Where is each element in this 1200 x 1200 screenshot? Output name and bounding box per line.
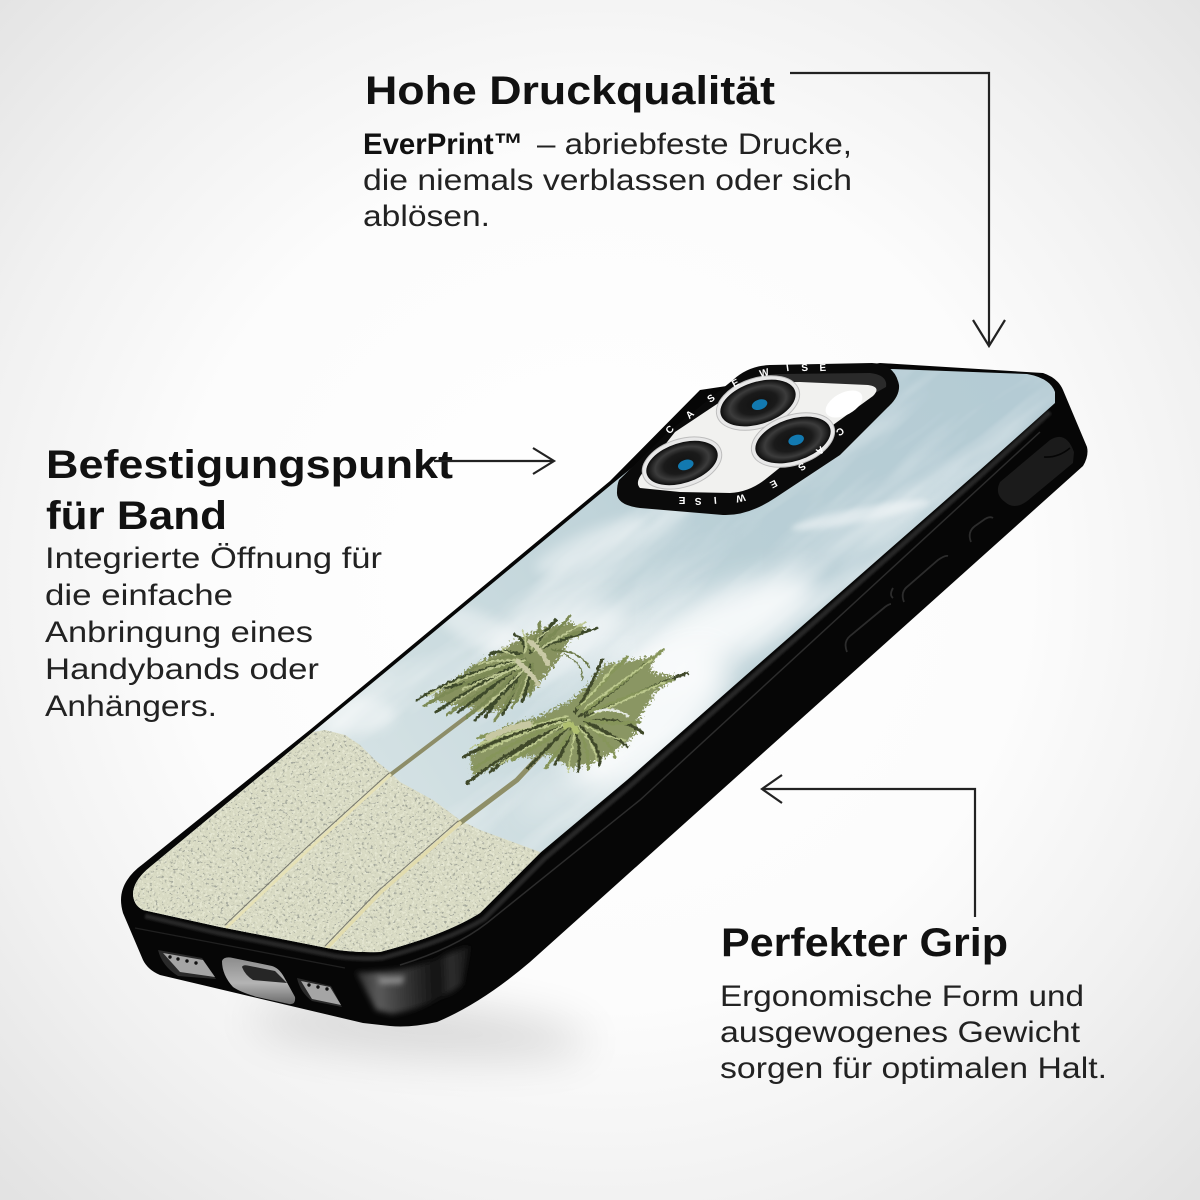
heading: Perfekter Grip <box>721 921 1008 965</box>
body text: EverPrint™ <box>363 128 523 161</box>
brand text: S <box>795 460 807 473</box>
callout: Perfekter Grip <box>720 921 1107 1085</box>
brand text: E <box>819 363 827 374</box>
heading: Befestigungspunkt <box>46 443 453 487</box>
wall texture light <box>133 730 537 952</box>
body text: Handybands oder <box>45 653 319 686</box>
body text <box>363 128 852 233</box>
brand text <box>664 363 846 506</box>
brand text: E <box>767 477 779 490</box>
speaker grille left <box>158 950 216 979</box>
corner glare <box>356 945 470 1014</box>
side seam <box>400 432 1040 965</box>
body text: – abriebfeste Drucke, <box>537 128 852 161</box>
heading: für Band <box>46 494 227 538</box>
callout: Hohe Druckqualität <box>363 69 852 233</box>
brand text: E <box>678 494 685 505</box>
side tab <box>998 437 1074 506</box>
arrow: print quality <box>790 73 1005 346</box>
printed back: palm artwork <box>133 369 1055 952</box>
body text: ausgewogenes Gewicht <box>720 1016 1081 1049</box>
tab line <box>1044 448 1070 457</box>
bottom seam <box>135 928 345 968</box>
palm 1 fronds <box>417 616 597 720</box>
body text: Anbringung eines <box>45 616 313 649</box>
body text <box>45 542 382 723</box>
body text <box>720 980 1107 1085</box>
body text: ablösen. <box>363 200 490 233</box>
palm 2 <box>463 650 687 783</box>
sky <box>133 369 1055 952</box>
lens: top <box>709 366 807 440</box>
frame top sheen <box>745 373 886 392</box>
brand text: S <box>694 495 702 506</box>
brand text: C <box>833 424 846 438</box>
arrow: grip <box>762 775 975 917</box>
charging port <box>222 957 295 1004</box>
palm 1 crown mass <box>432 622 588 711</box>
heading <box>46 443 453 538</box>
brand text: S <box>801 363 809 374</box>
palm 2 crown mass <box>470 656 675 776</box>
glass window <box>638 382 877 493</box>
camera frame <box>617 363 899 515</box>
case body <box>121 363 1088 1026</box>
phone shadow <box>249 992 591 1068</box>
wall texture dark <box>134 730 540 952</box>
brand text: S <box>706 392 718 405</box>
callout: Befestigungspunkt für Band <box>45 443 453 723</box>
clouds <box>212 370 1046 949</box>
palm trunks <box>225 705 545 948</box>
lens: right <box>744 403 842 477</box>
body text: sorgen für optimalen Halt. <box>720 1052 1107 1085</box>
lens: left <box>636 428 728 498</box>
camera module <box>617 363 899 515</box>
palm 1 <box>417 616 597 720</box>
inner rim sheen <box>145 412 1050 958</box>
brand text: W <box>758 367 771 380</box>
body text: die niemals verblassen oder sich <box>363 164 852 197</box>
volume and side buttons <box>846 517 993 652</box>
body text: die einfache <box>45 579 233 612</box>
body text: Integrierte Öffnung für <box>45 542 382 575</box>
body text: Ergonomische Form und <box>720 980 1084 1013</box>
arrow: strap attachment <box>434 448 554 474</box>
brand text: E <box>730 377 742 390</box>
concrete wall <box>133 730 540 952</box>
heading: Hohe Druckqualität <box>365 69 775 113</box>
phone case <box>121 363 1088 1026</box>
palm 2 fronds <box>463 650 687 783</box>
speaker grille right <box>297 978 342 1007</box>
brand text: A <box>813 443 826 457</box>
brand text: W <box>734 491 746 504</box>
body text: Anhängers. <box>45 690 217 723</box>
brand text: A <box>684 409 697 422</box>
brand text: I <box>713 494 717 505</box>
brand text: I <box>786 363 790 374</box>
flash <box>821 385 867 423</box>
corner glare highlight <box>378 976 405 984</box>
brand text: C <box>664 424 677 437</box>
